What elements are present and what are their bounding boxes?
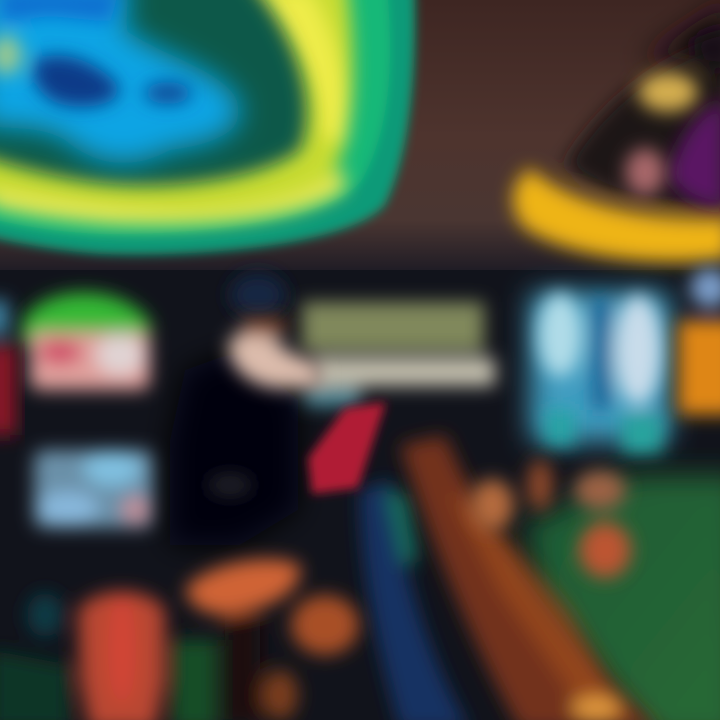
figure: dark character: [170, 350, 298, 545]
screen: dark green interior: [0, 0, 307, 186]
figure: arm and face highlight: [228, 318, 320, 388]
figure: red sleeve: [308, 402, 386, 494]
sign: pale banner behind figure: [302, 302, 495, 406]
screen: yellow neon band: [0, 0, 353, 225]
figures: small orange characters on right: [470, 459, 631, 578]
panel: orange machine far right: [678, 268, 720, 415]
wall: dark shade top right: [640, 0, 720, 60]
screen: dark blue shapes: [0, 0, 192, 107]
canopy: light patches: [625, 25, 720, 196]
panel: neon screen top left: [0, 0, 415, 255]
panel: yellow canopy top right: [513, 40, 720, 262]
panel: left arcade cabinet: [22, 292, 154, 528]
figures: orange characters in foreground: [0, 559, 359, 720]
panel: blue floor stripe: [360, 480, 470, 720]
screen: blue glow pattern: [0, 0, 241, 163]
railing: brown wooden counter: [400, 435, 660, 720]
panel: far left red edge: [0, 300, 16, 435]
floor: green carpet: [525, 475, 720, 720]
machines: highlights: [538, 293, 662, 453]
canopy: purple panel: [668, 100, 720, 208]
panel: blue machines right: [530, 292, 670, 442]
figure: head and torso detail: [208, 273, 286, 495]
